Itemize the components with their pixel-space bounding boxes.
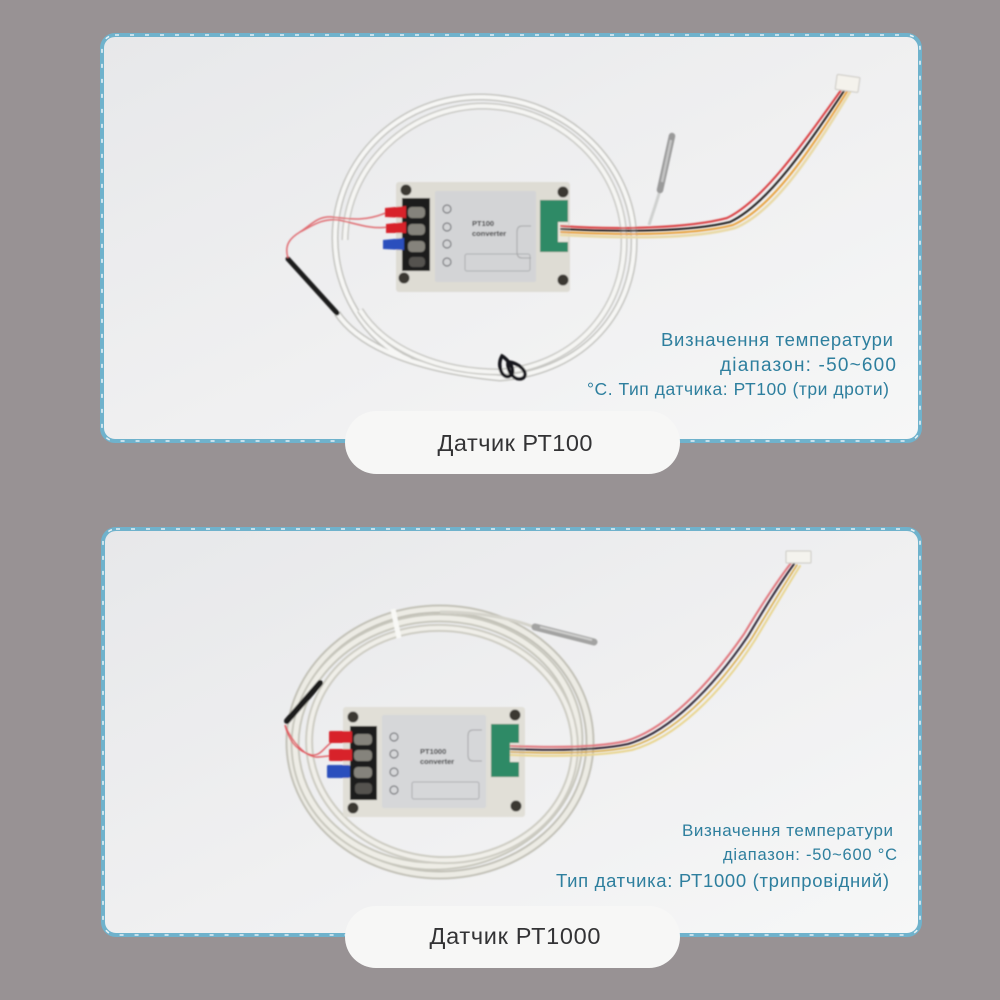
line 2: діапазон: -50~600 [720,355,896,376]
wire connector [786,551,811,563]
connector outline [468,730,482,761]
mounting holes [398,184,568,286]
panel: PT100 sensor [102,35,920,441]
metal probe [535,627,594,642]
description text [587,329,896,399]
description text [556,821,897,891]
product name: PT100 [472,219,494,228]
photo: PT1000 converter with cable [285,551,811,876]
crimp lugs [383,206,406,250]
crimp lugs [327,731,352,778]
pill text: Датчик РТ1000 [430,923,600,949]
thin red sensor wires [287,212,388,258]
line 2: діапазон: -50~600 °C [723,846,897,864]
line 3: Тип датчика: РТ1000 (трипровідний) [556,870,889,891]
line 3: °С. Тип датчика: РТ100 (три дроти) [587,379,889,399]
wire harness [561,86,850,237]
pill label: PT1000 [345,906,680,968]
green circuit board [540,200,568,252]
terminal block [350,726,377,800]
pill label: PT100 [345,411,680,474]
wire harness [511,563,800,756]
green circuit board [491,724,519,777]
label plate [382,715,486,808]
black sleeve [288,259,337,313]
cable tie [393,609,399,638]
black sleeve [287,683,320,721]
module body [343,707,525,817]
spec box [412,782,479,799]
cable coil [287,608,590,876]
product name line 2: converter [472,229,506,238]
spec box [465,254,530,271]
line 1: Визначення температури [661,329,893,350]
terminal screws [354,734,372,794]
module body [396,182,570,292]
mounting holes [348,710,522,814]
cable coil [335,97,660,378]
black twist tie [500,356,525,379]
metal probe [660,136,672,190]
terminal markers [390,733,398,794]
pill text: Датчик РТ100 [438,430,592,456]
board socket [558,222,568,242]
connector outline [517,226,531,258]
product name line 2: converter [420,757,454,766]
terminal screws [408,207,425,267]
thin red sensor wires [285,725,335,757]
label plate [435,191,536,282]
terminal block [402,198,430,271]
wire connector [835,74,860,92]
panel: PT1000 sensor [103,529,920,935]
product name: PT1000 [420,747,446,756]
photo: PT100 converter with cable [287,74,860,379]
terminal markers [443,205,451,266]
board socket [510,743,519,762]
line 1: Визначення температури [682,821,893,840]
